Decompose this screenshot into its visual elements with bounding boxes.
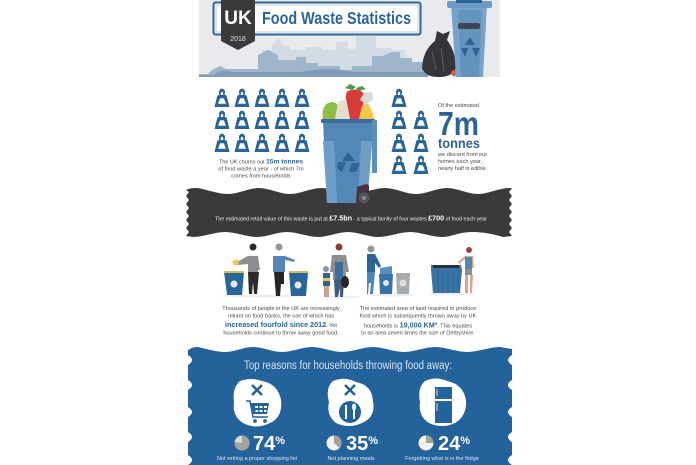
icon: cart with cross <box>234 379 281 426</box>
icon: rubbish bag <box>422 31 457 77</box>
chart: 24% pie <box>418 436 434 450</box>
title box <box>214 2 420 34</box>
skyline far <box>262 36 405 77</box>
adult and bag <box>336 244 342 250</box>
skyline near <box>199 50 428 77</box>
text: 7m tonnes: homes each year, <box>438 159 483 165</box>
text: land area: food which is subsequently thrown away by UK <box>360 314 477 320</box>
icon: central bin with food <box>321 84 377 204</box>
text: 7m tonnes: nearly half is edible. <box>438 166 488 172</box>
reason: planning meals <box>328 379 374 426</box>
skyline base <box>199 69 428 77</box>
icon: plate with cross <box>328 379 374 426</box>
text: 7m tonnes: Of the estimated <box>438 103 479 109</box>
badge: UK 2018: UK <box>224 8 252 29</box>
stat: 74%: 74 <box>253 433 275 455</box>
stat: 24%: % <box>460 435 470 447</box>
child <box>323 266 329 272</box>
stat: 35%: % <box>368 435 378 447</box>
grey bin <box>396 273 410 294</box>
large container <box>431 265 462 293</box>
woman at container <box>466 247 472 253</box>
text: land area: households is 19,000 KM². This equates <box>364 320 472 330</box>
text: food banks: Thousands of people in the UK are increasingly <box>222 306 340 312</box>
text: food banks: reliant on food banks, the use of which has <box>228 314 334 320</box>
title box: Food Waste Statistics <box>262 8 411 28</box>
reason: shopping list <box>234 379 281 426</box>
weights: 15m tonnes <box>214 89 310 152</box>
bin body <box>323 121 374 203</box>
food <box>323 102 340 119</box>
label: shopping list: Not writing a proper shopping list <box>217 456 298 462</box>
icon: recycle mark <box>461 37 480 57</box>
wheel <box>356 184 369 204</box>
person 2 <box>276 244 282 250</box>
stat: 35%: 35 <box>346 433 368 455</box>
text: 15m tonnes: The UK churns out 15m tonnes <box>219 158 303 166</box>
text: food banks <box>222 306 340 336</box>
blue bin <box>379 274 393 294</box>
text: food banks: increased fourfold since 2012. Yet <box>225 320 337 329</box>
illustration: people recycling, left <box>222 244 360 298</box>
recycle mark <box>337 152 360 172</box>
text: land area: to an area seven times the size of Derbyshire. <box>361 330 475 336</box>
chart: 35% pie <box>326 436 342 450</box>
text: 15m tonnes: of food waste a year - of which 7m <box>218 166 304 172</box>
text: 7m tonnes: 7m <box>438 105 479 142</box>
chart: 74% pie <box>234 435 250 450</box>
panel: top reasons <box>188 347 512 465</box>
bin 2 <box>289 272 308 296</box>
weights: 7m tonnes <box>392 89 428 174</box>
stat: 74%: % <box>275 435 285 447</box>
label: forgetting fridge: Forgetting what is in the fridge <box>405 456 479 462</box>
heading: Top reasons for households throwing food away: <box>244 360 452 372</box>
container ribs <box>438 270 458 291</box>
illustration: people recycling, right <box>366 246 476 296</box>
bin 1 <box>224 272 244 295</box>
badge: UK 2018 <box>221 0 255 50</box>
text: land area <box>360 306 477 336</box>
icon: fridge <box>419 378 466 426</box>
text: 7m tonnes <box>437 103 488 172</box>
woman with bins <box>368 246 374 252</box>
text: land area: The estimated area of land required to produce <box>360 306 476 312</box>
ground shadows <box>366 294 414 296</box>
text: 7m tonnes: we discard from our <box>437 152 487 158</box>
text: retail value: The estimated retail value of this waste is put at £7.5bn - a typical family of four wastes £700 of food each year <box>215 214 487 222</box>
icon: wheelie bin <box>447 0 492 77</box>
header banner <box>199 0 500 77</box>
ground shadows <box>222 294 302 298</box>
text: 15m tonnes <box>218 158 304 180</box>
text: 7m tonnes: tonnes <box>438 136 480 151</box>
band: retail value <box>186 188 512 237</box>
reason: forgetting fridge <box>419 378 466 426</box>
text: 15m tonnes: comes from households <box>231 174 291 180</box>
person 1 <box>250 244 256 250</box>
badge: UK 2018: 2018 <box>230 36 246 43</box>
stat: 24%: 24 <box>438 433 460 455</box>
text: food banks: households continue to throw away good food. <box>223 330 339 336</box>
label: planning meals: Not planning meals <box>327 456 375 462</box>
